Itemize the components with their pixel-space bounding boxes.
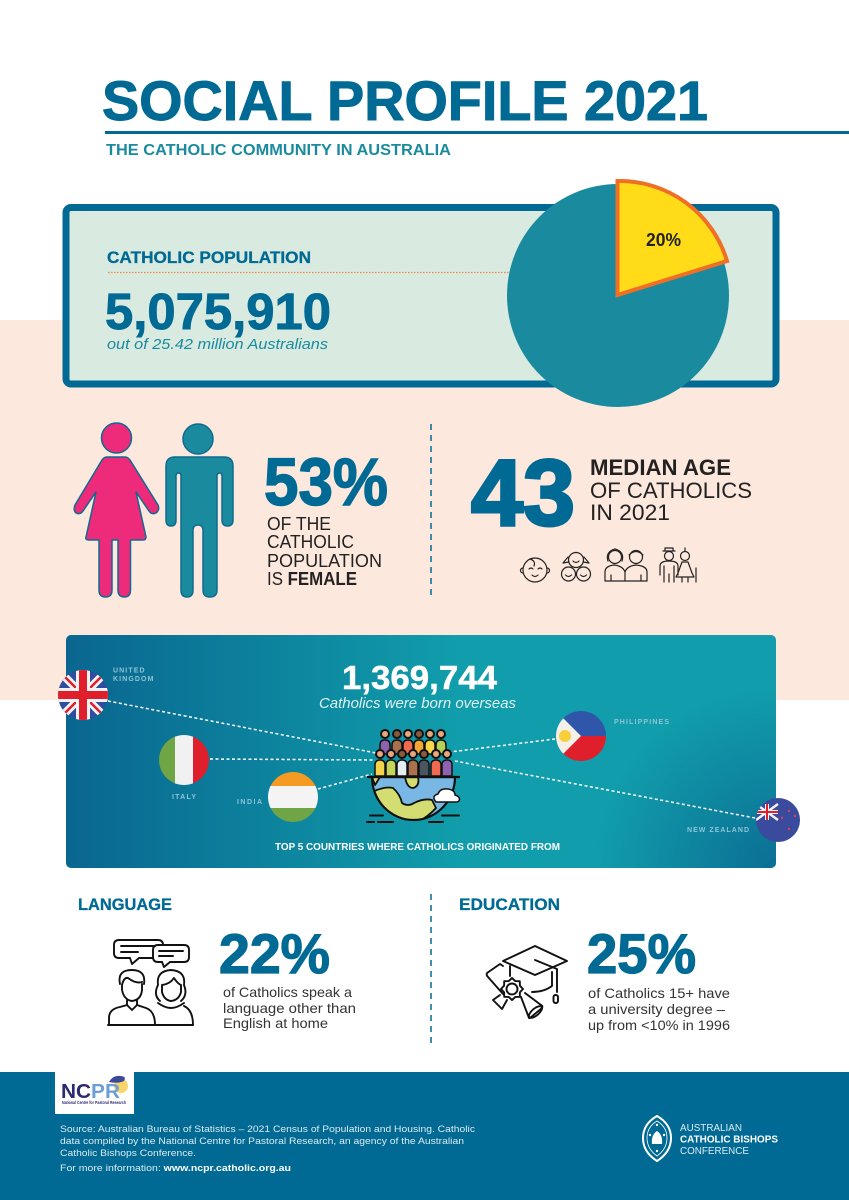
panel: born overseas [58,635,800,868]
stat: 53 percent female [264,445,388,589]
stat: median age: MEDIAN AGE [590,455,731,480]
overseas number: 1,369,744 [342,659,498,696]
flag: philippines [556,711,606,761]
stat: 53 percent female: 53% [264,445,388,520]
icon: male figure [166,424,233,597]
population number: 5,075,910 [105,283,331,340]
panel: catholic population [66,181,776,407]
stat: 22 percent: 22% [219,922,330,985]
stat: 53 percent female: CATHOLIC [267,532,354,552]
heading: catholic population: CATHOLIC POPULATION [107,249,311,267]
icon: globe with people [367,730,460,824]
flag: india [268,772,318,822]
section: language [78,895,356,1031]
people: front row [375,750,452,776]
flag: new zealand [756,798,800,842]
language description: of Catholics speak a [223,984,352,1000]
people: back row [380,730,446,754]
icon: adults [605,549,647,581]
logo: bishops conference: CATHOLIC BISHOPS [680,1134,778,1146]
logo: NCPR [55,1072,134,1114]
logo: NCPR: National Centre for Pastoral Research [62,1100,126,1105]
overseas caption: Catholics were born overseas [319,695,516,712]
flag: united kingdom [58,670,108,720]
title: SOCIAL PROFILE 2021 [102,69,708,132]
flag: italy [159,735,210,785]
footer [0,1072,849,1200]
subtitle: THE CATHOLIC COMMUNITY IN AUSTRALIA [106,142,451,159]
language description: English at home [223,1015,328,1031]
stat: 53 percent female: OF THE [267,514,331,534]
stat: median age [471,440,752,545]
source text: data compiled by the National Centre for Pastoral Research, an agency of the Australian [60,1136,464,1147]
logo: bishops conference: CONFERENCE [680,1146,749,1157]
label: united kingdom: KINGDOM [113,676,155,683]
stat: 25 percent: 25% [587,922,696,985]
stat: median age: 43 [471,440,575,545]
label: united kingdom: UNITED [113,668,146,674]
section: education [459,895,730,1033]
label: philippines: PHILIPPINES [614,719,669,726]
pie chart [507,181,729,407]
label: new zealand: NEW ZEALAND [687,827,749,834]
logo: bishops conference [643,1116,778,1161]
icon: graduation cap and diploma [487,946,567,1020]
pie chart: 20% [646,230,681,250]
caption: top 5 countries: TOP 5 COUNTRIES WHERE CATHOLICS ORIGINATED FROM [275,842,560,853]
label: italy: ITALY [172,794,196,801]
education description: up from <10% in 1996 [588,1017,730,1033]
source text: Source: Australian Bureau of Statistics – 2021 Census of Population and Housing. Catholic [60,1124,475,1135]
heading: education: EDUCATION [459,895,560,914]
education description: a university degree – [588,1001,725,1017]
population note: out of 25.42 million Australians [107,336,329,353]
icon: cloud [434,789,460,802]
dotted connectors [108,701,755,818]
stat: median age: OF CATHOLICS [590,478,752,503]
icons: life stages [520,548,696,582]
label: india: INDIA [237,799,262,806]
icon: children [562,552,590,581]
icon: elderly [660,548,696,582]
logo: NCPR: NCPR [61,1081,121,1103]
stat: 53 percent female: POPULATION [267,551,382,571]
stat: 53 percent female: IS FEMALE [267,569,357,589]
source text: Catholic Bishops Conference. [60,1148,196,1159]
language description: language other than [223,1000,356,1016]
icon: female figure [74,423,159,597]
stat: median age: IN 2021 [590,500,670,525]
more information: For more information: www.ncpr.catholic.org.au [60,1163,291,1174]
logo: bishops conference: AUSTRALIAN [680,1123,742,1134]
icon: baby [520,558,550,582]
education description: of Catholics 15+ have [588,985,730,1001]
heading: language: LANGUAGE [78,895,172,914]
icon: two people speaking [108,940,193,1025]
